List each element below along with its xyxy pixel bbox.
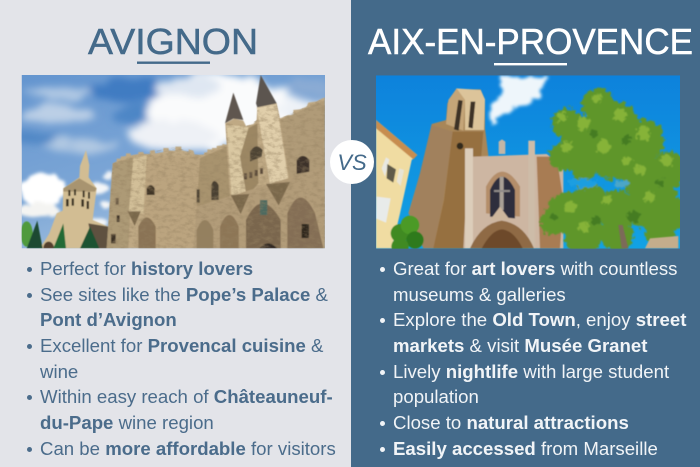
bullet list: Aix-en-Provence highlights: Easily accessed from Marseille <box>393 438 658 459</box>
left house <box>376 120 417 248</box>
bush <box>391 224 409 243</box>
bullet list: Aix-en-Provence highlights: Lively nightlife with large student <box>393 361 669 382</box>
bullet list: Aix-en-Provence highlights: population <box>393 386 479 407</box>
bullet list: Avignon highlights: du-Pape wine region <box>40 412 214 433</box>
bullet list: Avignon highlights: Within easy reach of Châteauneuf- <box>40 386 333 407</box>
palace walls <box>107 97 325 248</box>
bullet list: Avignon highlights <box>27 258 336 459</box>
arches <box>138 218 156 248</box>
cathedral tower <box>40 150 108 248</box>
heading: Avignon: AVIGNON <box>88 21 258 62</box>
corbels <box>128 211 141 226</box>
bullet list: Avignon highlights: Excellent for Provencal cuisine & <box>40 335 323 356</box>
spires <box>225 93 243 123</box>
bullet list: Avignon highlights: wine <box>40 361 78 382</box>
bullet list: Aix-en-Provence highlights: museums & galleries <box>393 284 566 305</box>
photo: Palais des Papes <box>22 75 325 248</box>
trees <box>21 221 33 247</box>
panel: Avignon <box>22 28 336 455</box>
panel: Aix-en-Provence <box>351 0 700 467</box>
photo: Saint-Sauveur cathedral <box>376 75 680 249</box>
badge: VS: VS <box>337 150 367 175</box>
bullet list: Avignon highlights: Perfect for history lovers <box>40 258 253 279</box>
bullet list: Aix-en-Provence highlights: Great for art lovers with countless <box>393 258 677 279</box>
tower <box>408 89 488 248</box>
bullet list: Avignon highlights: Can be more affordable for visitors <box>40 438 336 459</box>
badge: VS <box>330 140 374 184</box>
tree <box>540 88 688 253</box>
bullet list: Aix-en-Provence highlights: Explore the Old Town, enjoy street <box>393 309 686 330</box>
facade <box>463 154 563 248</box>
windows <box>297 156 309 174</box>
bullet list: Aix-en-Provence highlights: markets & visit Musée Granet <box>393 335 647 356</box>
bullet list: Aix-en-Provence highlights: Close to natural attractions <box>393 412 629 433</box>
bullet list: Avignon highlights: Pont d’Avignon <box>40 309 177 330</box>
bullet list: Aix-en-Provence highlights <box>380 258 686 459</box>
bullet list: Avignon highlights: See sites like the Pope’s Palace & <box>40 284 328 305</box>
heading: Aix-en-Provence: AIX-EN-PROVENCE <box>368 21 693 62</box>
